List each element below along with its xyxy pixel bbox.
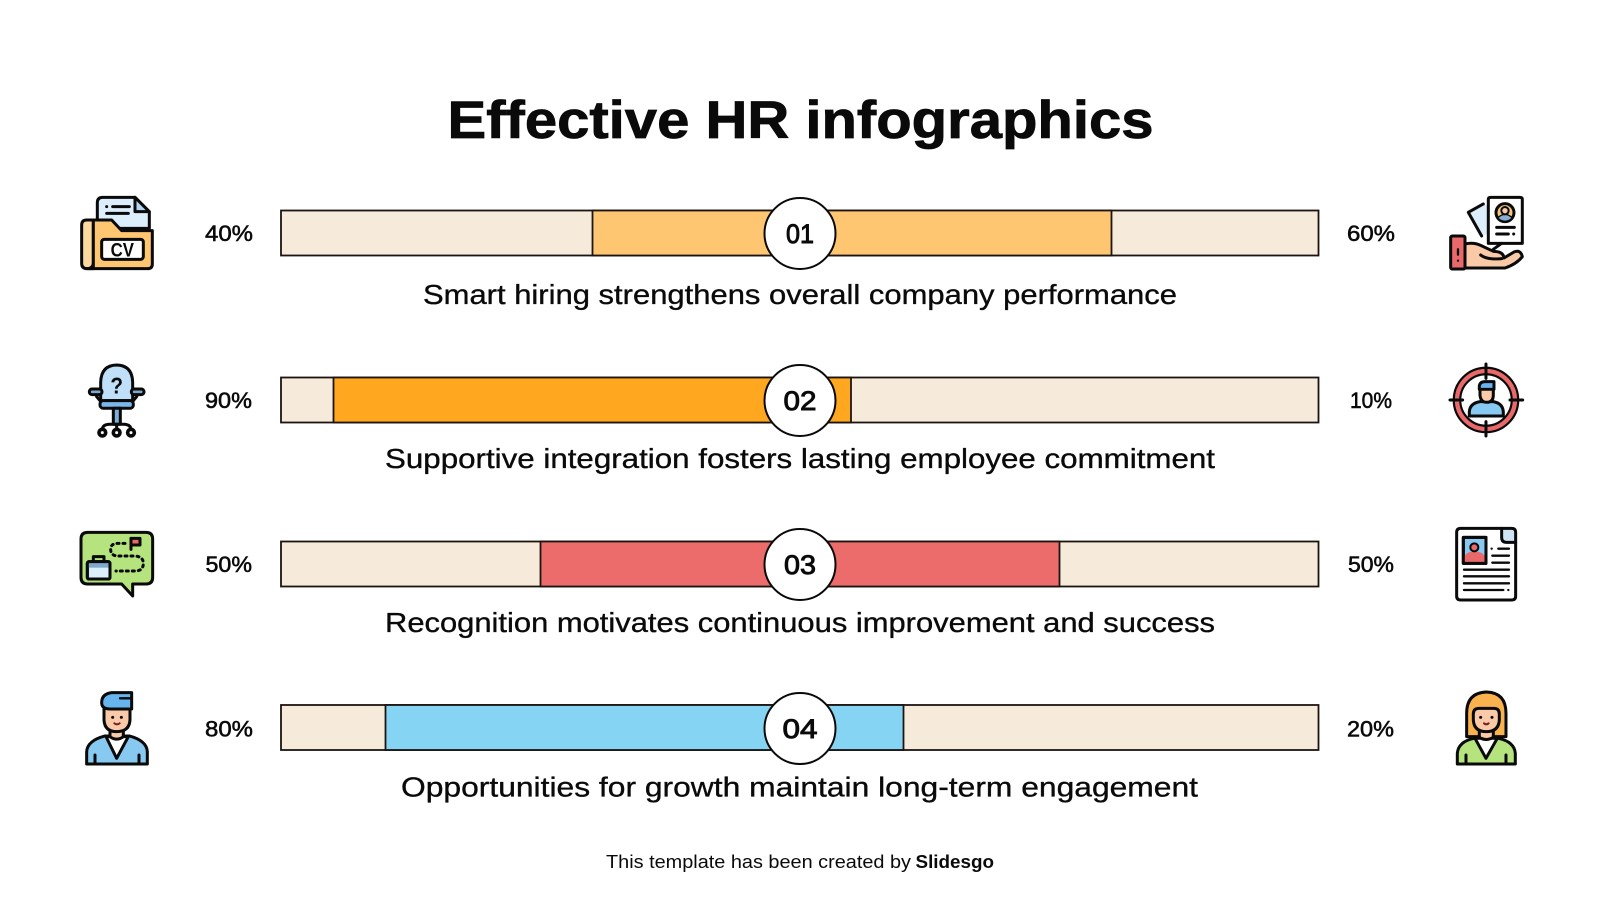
caption: Opportunities for growth maintain long-term engagement bbox=[401, 772, 1198, 802]
footer credit: Slidesgo bbox=[916, 852, 994, 872]
right percentage: 50% bbox=[1348, 552, 1394, 577]
caption: Smart hiring strengthens overall company performance bbox=[423, 279, 1177, 310]
bar: 50 / 50 split bbox=[281, 542, 1318, 586]
number badge 03 bbox=[764, 529, 836, 600]
row 3 bbox=[81, 528, 1516, 638]
left percentage: 80% bbox=[205, 716, 253, 742]
row 2 bbox=[89, 364, 1523, 474]
icon: resume document bbox=[1457, 528, 1516, 600]
row 1 bbox=[82, 197, 1522, 310]
number badge 04 bbox=[764, 693, 836, 764]
icon: career path speech bubble bbox=[81, 532, 153, 596]
icon: office chair with question mark bbox=[89, 365, 144, 436]
right percentage: 10% bbox=[1350, 388, 1392, 413]
caption: Recognition motivates continuous improvement and success bbox=[385, 607, 1215, 638]
left percentage: 50% bbox=[206, 552, 252, 577]
icon: office chair with question mark: ? bbox=[110, 372, 123, 398]
right percentage: 60% bbox=[1347, 221, 1395, 246]
icon: female employee bbox=[1457, 692, 1515, 764]
caption: Supportive integration fosters lasting employee commitment bbox=[385, 443, 1215, 474]
number badge 01 bbox=[764, 198, 836, 269]
icon: male employee bbox=[87, 693, 147, 764]
icon: target on person bbox=[1450, 364, 1523, 436]
row 4 bbox=[87, 692, 1515, 802]
left percentage: 40% bbox=[205, 221, 253, 246]
number badge 01: 01 bbox=[786, 219, 814, 249]
number badge 03: 03 bbox=[784, 550, 816, 580]
right percentage: 20% bbox=[1347, 716, 1394, 742]
icon: CV folder: CV bbox=[111, 241, 134, 262]
number badge 04: 04 bbox=[782, 714, 818, 744]
number badge 02: 02 bbox=[784, 386, 816, 416]
icon: CV folder bbox=[82, 197, 152, 269]
bar: 40 / 60 split bbox=[281, 210, 1318, 256]
title: Effective HR infographics bbox=[448, 91, 1154, 150]
left percentage: 90% bbox=[205, 388, 252, 413]
bar: 80 / 20 split bbox=[281, 705, 1318, 750]
icon: hand holding resume bbox=[1451, 197, 1522, 269]
bar: 90 / 10 split bbox=[281, 378, 1318, 422]
footer credit: This template has been created by bbox=[606, 852, 911, 872]
number badge 02 bbox=[764, 365, 836, 436]
